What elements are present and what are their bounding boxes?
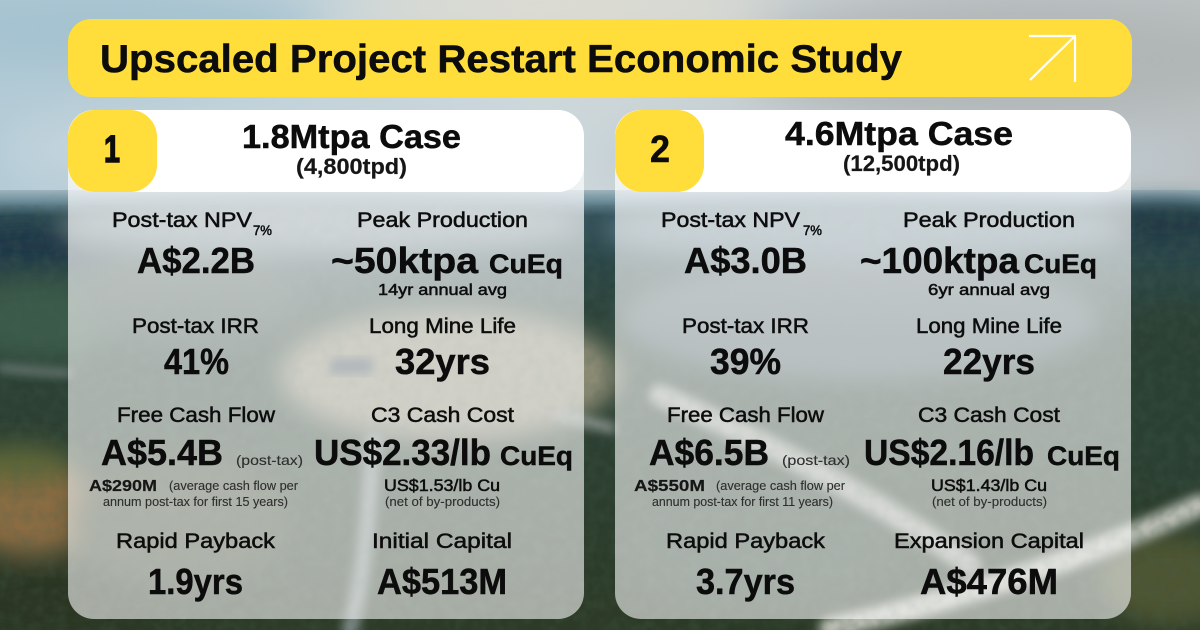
metric: rapid payback: 1.9yrs: [148, 561, 243, 602]
metric: free cash flow: (post-tax): [236, 452, 303, 468]
case header bar: 4.6Mtpa Case: [785, 115, 1013, 152]
metric: initial capital: [372, 529, 512, 602]
case header bar: 2: [650, 129, 670, 171]
metric: free cash flow: A$290M: [89, 478, 157, 495]
metric: C3 cash cost: CuEq: [500, 441, 573, 471]
metric: peak production: [331, 208, 563, 299]
metric: rapid payback: Rapid Payback: [666, 529, 825, 553]
metric: peak production: ~100ktpa: [860, 240, 1020, 281]
metric: free cash flow: (post-tax): [782, 452, 850, 468]
metric: peak production: Peak Production: [357, 208, 528, 232]
metric: free cash flow: A$5.4B: [101, 432, 223, 473]
title: Upscaled Project Restart Economic Study: [100, 38, 902, 81]
metric: C3 cash cost: CuEq: [1047, 441, 1120, 471]
metric: expansion capital: [894, 529, 1084, 602]
metric: post-tax NPV: A$2.2B: [137, 240, 255, 281]
case header bar: 1.8Mtpa Case: [242, 118, 461, 155]
metric: rapid payback: 3.7yrs: [696, 561, 795, 602]
metric: post-tax IRR: Post-tax IRR: [132, 314, 259, 338]
metric: expansion capital: Expansion Capital: [894, 529, 1084, 553]
metric: long mine life: 22yrs: [943, 341, 1035, 382]
metric: post-tax NPV: Post-tax NPV: [661, 208, 801, 232]
metric: free cash flow: A$6.5B: [649, 432, 769, 473]
metric: C3 cash cost: US$2.16/lb: [864, 432, 1034, 473]
metric: post-tax NPV: 7%: [803, 223, 822, 238]
metric: long mine life: [369, 314, 516, 382]
metric: rapid payback: [666, 529, 825, 602]
case header bar: [68, 110, 584, 192]
metric: initial capital: Initial Capital: [372, 529, 512, 553]
metric: post-tax NPV: 7%: [253, 223, 272, 238]
metric: peak production: ~50ktpa: [331, 240, 479, 281]
icon: arrow up-right: [1029, 36, 1075, 82]
metric: free cash flow: Free Cash Flow: [667, 403, 824, 427]
metric: post-tax NPV: Post-tax NPV: [112, 208, 253, 232]
metric: long mine life: [916, 314, 1062, 382]
title banner: [68, 19, 1132, 97]
metric: free cash flow: (average cash flow per: [716, 479, 845, 493]
case header bar: [615, 110, 1131, 192]
metric: peak production: 6yr annual avg: [928, 282, 1050, 299]
metric: post-tax NPV: [661, 208, 822, 281]
metric: peak production: [860, 208, 1097, 299]
metric: C3 cash cost: [864, 403, 1120, 509]
metric: free cash flow: (average cash flow per: [169, 479, 298, 493]
metric: C3 cash cost: (net of by-products): [385, 495, 500, 509]
metric: C3 cash cost: (net of by-products): [932, 495, 1047, 509]
metric: peak production: 14yr annual avg: [378, 282, 507, 299]
metric: C3 cash cost: US$1.43/lb Cu: [931, 476, 1047, 495]
metric: rapid payback: [116, 529, 275, 602]
metric: long mine life: Long Mine Life: [916, 314, 1062, 338]
metric: post-tax IRR: Post-tax IRR: [682, 314, 809, 338]
metric: free cash flow: [89, 403, 303, 509]
panel: 4.6Mtpa case: [615, 110, 1131, 619]
metric: free cash flow: A$550M: [634, 478, 705, 495]
metric: post-tax NPV: A$3.0B: [684, 240, 807, 281]
metric: C3 cash cost: US$2.33/lb: [314, 432, 491, 473]
metric: free cash flow: annum post-tax for first 11 years): [652, 495, 833, 509]
metric: rapid payback: Rapid Payback: [116, 529, 275, 553]
case header bar: (4,800tpd): [296, 154, 407, 179]
metric: C3 cash cost: [314, 403, 573, 509]
metric: post-tax IRR: [682, 314, 809, 382]
metric: peak production: CuEq: [1024, 249, 1097, 279]
metric: post-tax IRR: [132, 314, 259, 382]
metric: post-tax IRR: 41%: [164, 341, 229, 382]
metric: post-tax IRR: 39%: [710, 341, 781, 382]
metric: free cash flow: [634, 403, 850, 509]
metric: free cash flow: annum post-tax for first 15 years): [103, 495, 288, 509]
metric: C3 cash cost: US$1.53/lb Cu: [384, 476, 500, 495]
metric: C3 cash cost: C3 Cash Cost: [371, 403, 514, 427]
case header bar: 1: [104, 129, 120, 171]
case header bar: (12,500tpd): [843, 151, 960, 176]
metric: peak production: CuEq: [489, 249, 563, 279]
metric: long mine life: 32yrs: [395, 341, 490, 382]
metric: initial capital: A$513M: [377, 561, 507, 602]
metric: C3 cash cost: C3 Cash Cost: [918, 403, 1060, 427]
metric: expansion capital: A$476M: [920, 561, 1058, 602]
panel: 1.8Mtpa case: [68, 110, 584, 619]
metric: long mine life: Long Mine Life: [369, 314, 516, 338]
metric: peak production: Peak Production: [903, 208, 1075, 232]
metric: post-tax NPV: [112, 208, 272, 281]
metric: free cash flow: Free Cash Flow: [117, 403, 275, 427]
